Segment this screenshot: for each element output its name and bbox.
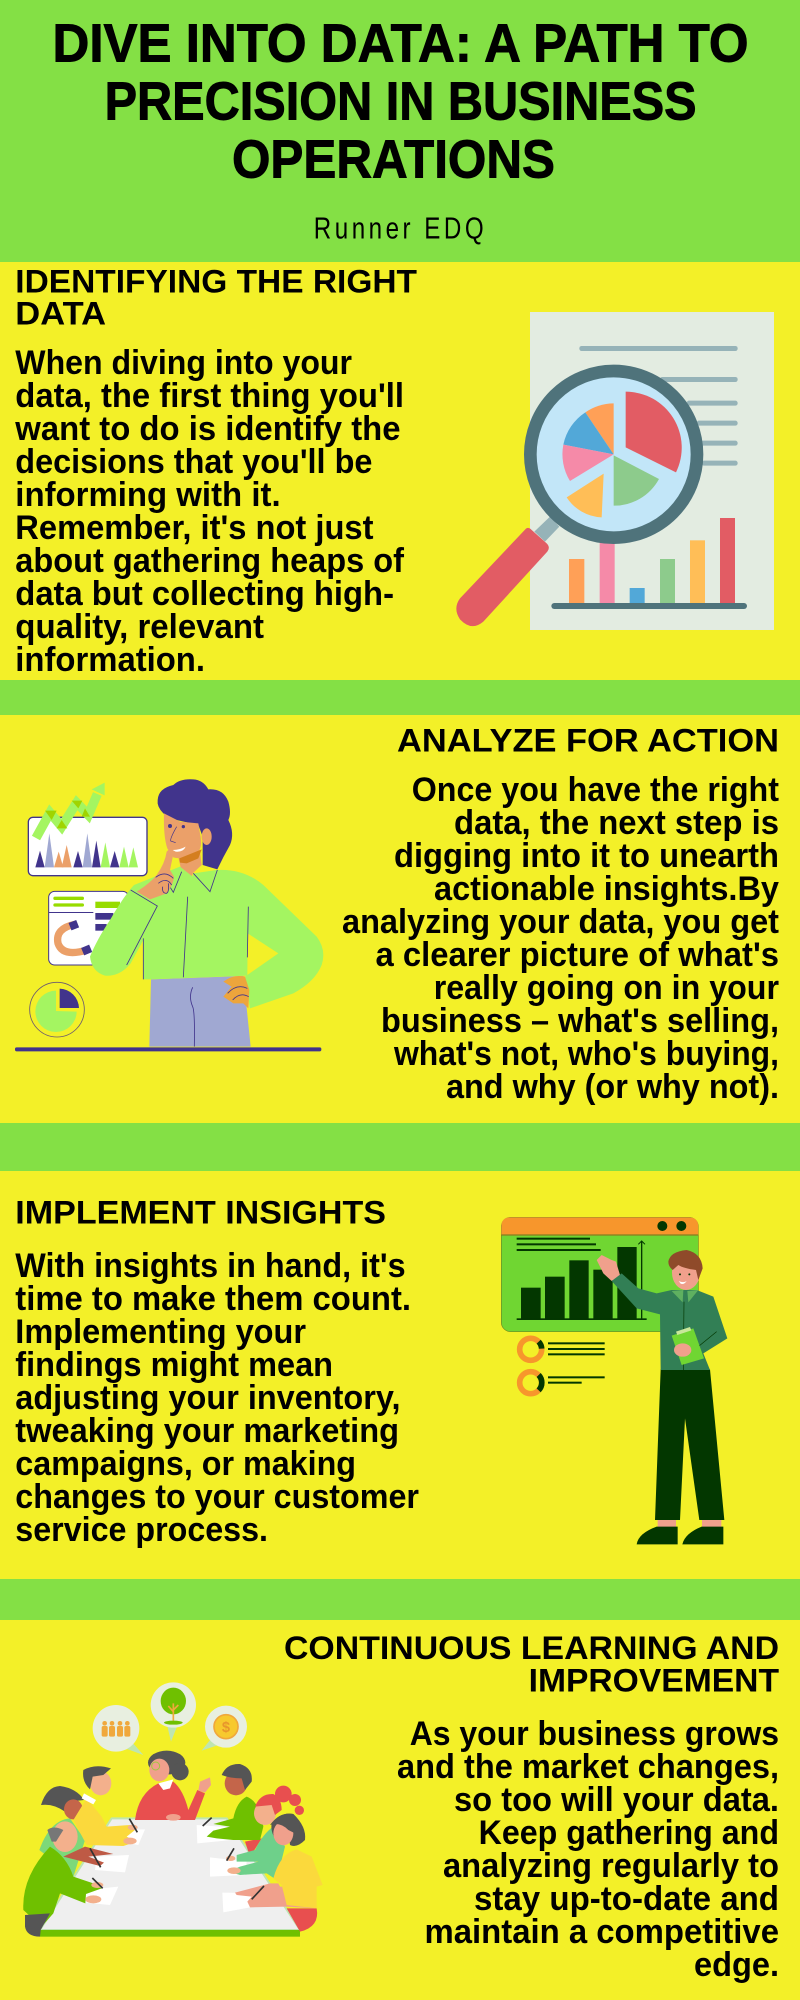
text block: implement insights: tweaking your marketing — [15, 1412, 399, 1450]
title: OPERATIONS — [232, 130, 555, 190]
title — [52, 14, 748, 190]
title: DIVE INTO DATA: A PATH TO — [52, 14, 748, 74]
text block: analyze for action: really going on in your — [434, 969, 779, 1007]
text block: implement insights: findings might mean — [15, 1346, 333, 1384]
panel: identifying the right data — [0, 262, 800, 680]
text block: analyze for action — [342, 771, 779, 1106]
heading: analyze for action: ANALYZE FOR ACTION — [397, 723, 779, 759]
text block: implement insights: With insights in hand, it's — [15, 1247, 406, 1285]
text block: analyze for action: actionable insights.By — [434, 870, 779, 908]
heading: continuous learning and improvement — [284, 1630, 779, 1699]
text block: continuous learning and improvement: As your business grows — [410, 1715, 779, 1753]
text block: continuous learning and improvement: maintain a competitive — [424, 1913, 779, 1951]
text block: implement insights: service process. — [15, 1511, 268, 1549]
heading: continuous learning and improvement: IMPROVEMENT — [529, 1663, 779, 1699]
text block: identifying the right data: When diving into your — [15, 344, 352, 382]
text block: continuous learning and improvement: edge. — [694, 1946, 779, 1984]
panel: implement insights — [0, 1171, 800, 1579]
text block: analyze for action: business – what's selling, — [381, 1002, 779, 1040]
text block: implement insights: campaigns, or making — [15, 1445, 356, 1483]
subtitle: Runner EDQ: Runner EDQ — [314, 211, 487, 245]
text block: identifying the right data: about gathering heaps of — [15, 542, 405, 580]
panel: continuous learning and improvement — [0, 1620, 800, 2000]
panel: analyze for action — [0, 715, 800, 1123]
text block: continuous learning and improvement: stay up-to-date and — [474, 1880, 779, 1918]
text block: identifying the right data: informing with it. — [15, 476, 281, 514]
icon: presenter with bar chart screen — [501, 1217, 727, 1544]
text block: continuous learning and improvement — [397, 1715, 779, 1984]
text block: analyze for action: data, the next step is — [454, 804, 779, 842]
heading: identifying the right data: IDENTIFYING THE RIGHT — [15, 263, 417, 299]
icon: team meeting around table: $ — [222, 1720, 230, 1736]
icon: thinking person with charts — [15, 779, 323, 1051]
text block: identifying the right data: quality, relevant — [15, 608, 264, 646]
text block: continuous learning and improvement: so too will your data. — [454, 1781, 779, 1819]
heading: identifying the right data: DATA — [15, 296, 106, 332]
text block: analyze for action: analyzing your data, you get — [342, 903, 779, 941]
text block: implement insights — [15, 1247, 419, 1549]
text block: analyze for action: a clearer picture of what's — [376, 936, 779, 974]
text block: identifying the right data: information. — [15, 641, 205, 679]
icon: team meeting around table — [23, 1682, 323, 1937]
text block: identifying the right data: decisions that you'll be — [15, 443, 372, 481]
heading: continuous learning and improvement: CONTINUOUS LEARNING AND — [284, 1630, 779, 1666]
text block: implement insights: changes to your customer — [15, 1478, 419, 1516]
text block: analyze for action: what's not, who's buying, — [393, 1035, 779, 1073]
text block: continuous learning and improvement: and the market changes, — [397, 1748, 779, 1786]
icon: magnifying glass over report — [456, 312, 774, 630]
title: PRECISION IN BUSINESS — [105, 72, 697, 132]
text block: identifying the right data: want to do is identify the — [14, 410, 400, 448]
text block: continuous learning and improvement: analyzing regularly to — [443, 1847, 779, 1885]
header panel — [0, 0, 800, 262]
text block: analyze for action: and why (or why not). — [446, 1068, 779, 1106]
text block: implement insights: adjusting your inventory, — [15, 1379, 401, 1417]
text block: identifying the right data — [14, 344, 405, 679]
text block: continuous learning and improvement: Keep gathering and — [479, 1814, 779, 1852]
text block: identifying the right data: data but collecting high- — [15, 575, 394, 613]
heading: identifying the right data — [15, 263, 417, 332]
text block: analyze for action: digging into it to unearth — [394, 837, 779, 875]
text block: identifying the right data: data, the first thing you'll — [15, 377, 404, 415]
text block: identifying the right data: Remember, it's not just — [15, 509, 374, 547]
text block: implement insights: time to make them count. — [15, 1280, 411, 1318]
text block: analyze for action: Once you have the right — [412, 771, 779, 809]
text block: implement insights: Implementing your — [15, 1313, 306, 1351]
heading: implement insights: IMPLEMENT INSIGHTS — [15, 1195, 386, 1231]
